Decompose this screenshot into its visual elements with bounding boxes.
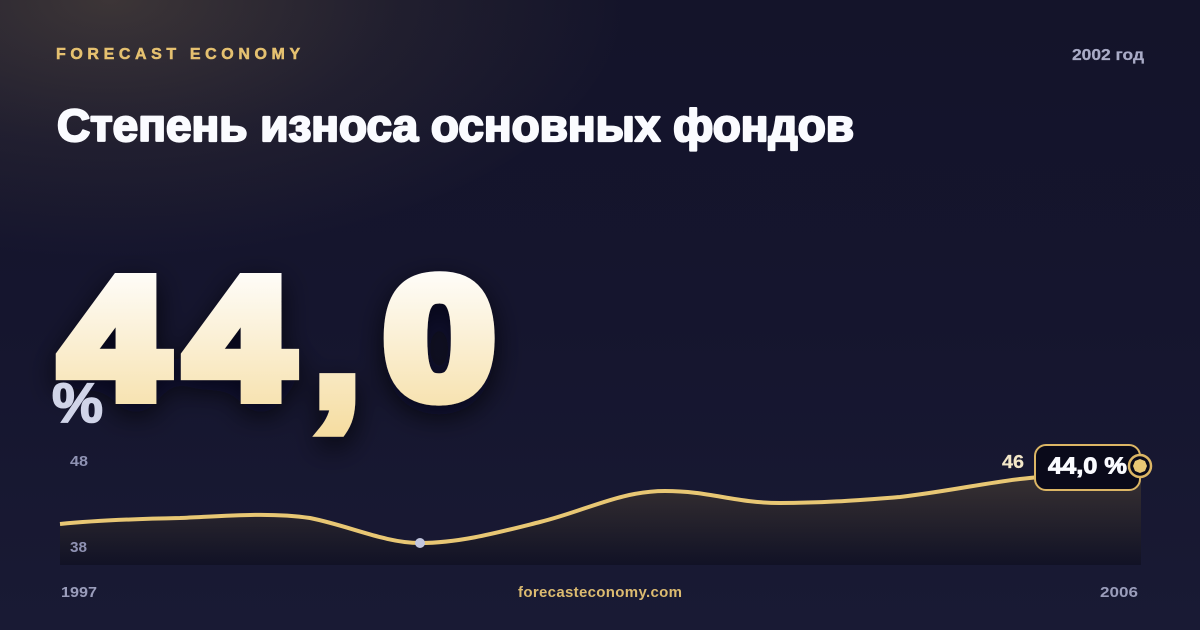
y-axis labels xyxy=(70,454,88,556)
y-axis labels: 48 xyxy=(70,454,88,470)
unit percent: % xyxy=(52,371,103,434)
trend line xyxy=(60,466,1141,543)
big value: 44 xyxy=(61,244,292,434)
area fill xyxy=(60,466,1141,565)
area chart xyxy=(60,445,1151,565)
source url: forecasteconomy.com xyxy=(518,584,682,601)
x-axis start year: 1997 xyxy=(61,584,97,601)
callout: current value xyxy=(1035,445,1140,490)
current point marker xyxy=(1129,455,1151,477)
x-axis end year: 2006 xyxy=(1100,584,1138,601)
big value: 0 xyxy=(384,244,495,434)
brand label: FORECAST ECONOMY xyxy=(56,46,305,63)
big value: , xyxy=(314,251,361,441)
year label: 2002 год xyxy=(1072,47,1144,64)
y-axis labels: 38 xyxy=(70,540,87,556)
big value xyxy=(61,244,495,441)
minimum marker xyxy=(415,538,425,548)
maximum label: 46 xyxy=(1002,452,1024,472)
title: Степень износа основных фондов xyxy=(57,100,854,151)
callout: current value: 44,0 % xyxy=(1048,452,1127,478)
